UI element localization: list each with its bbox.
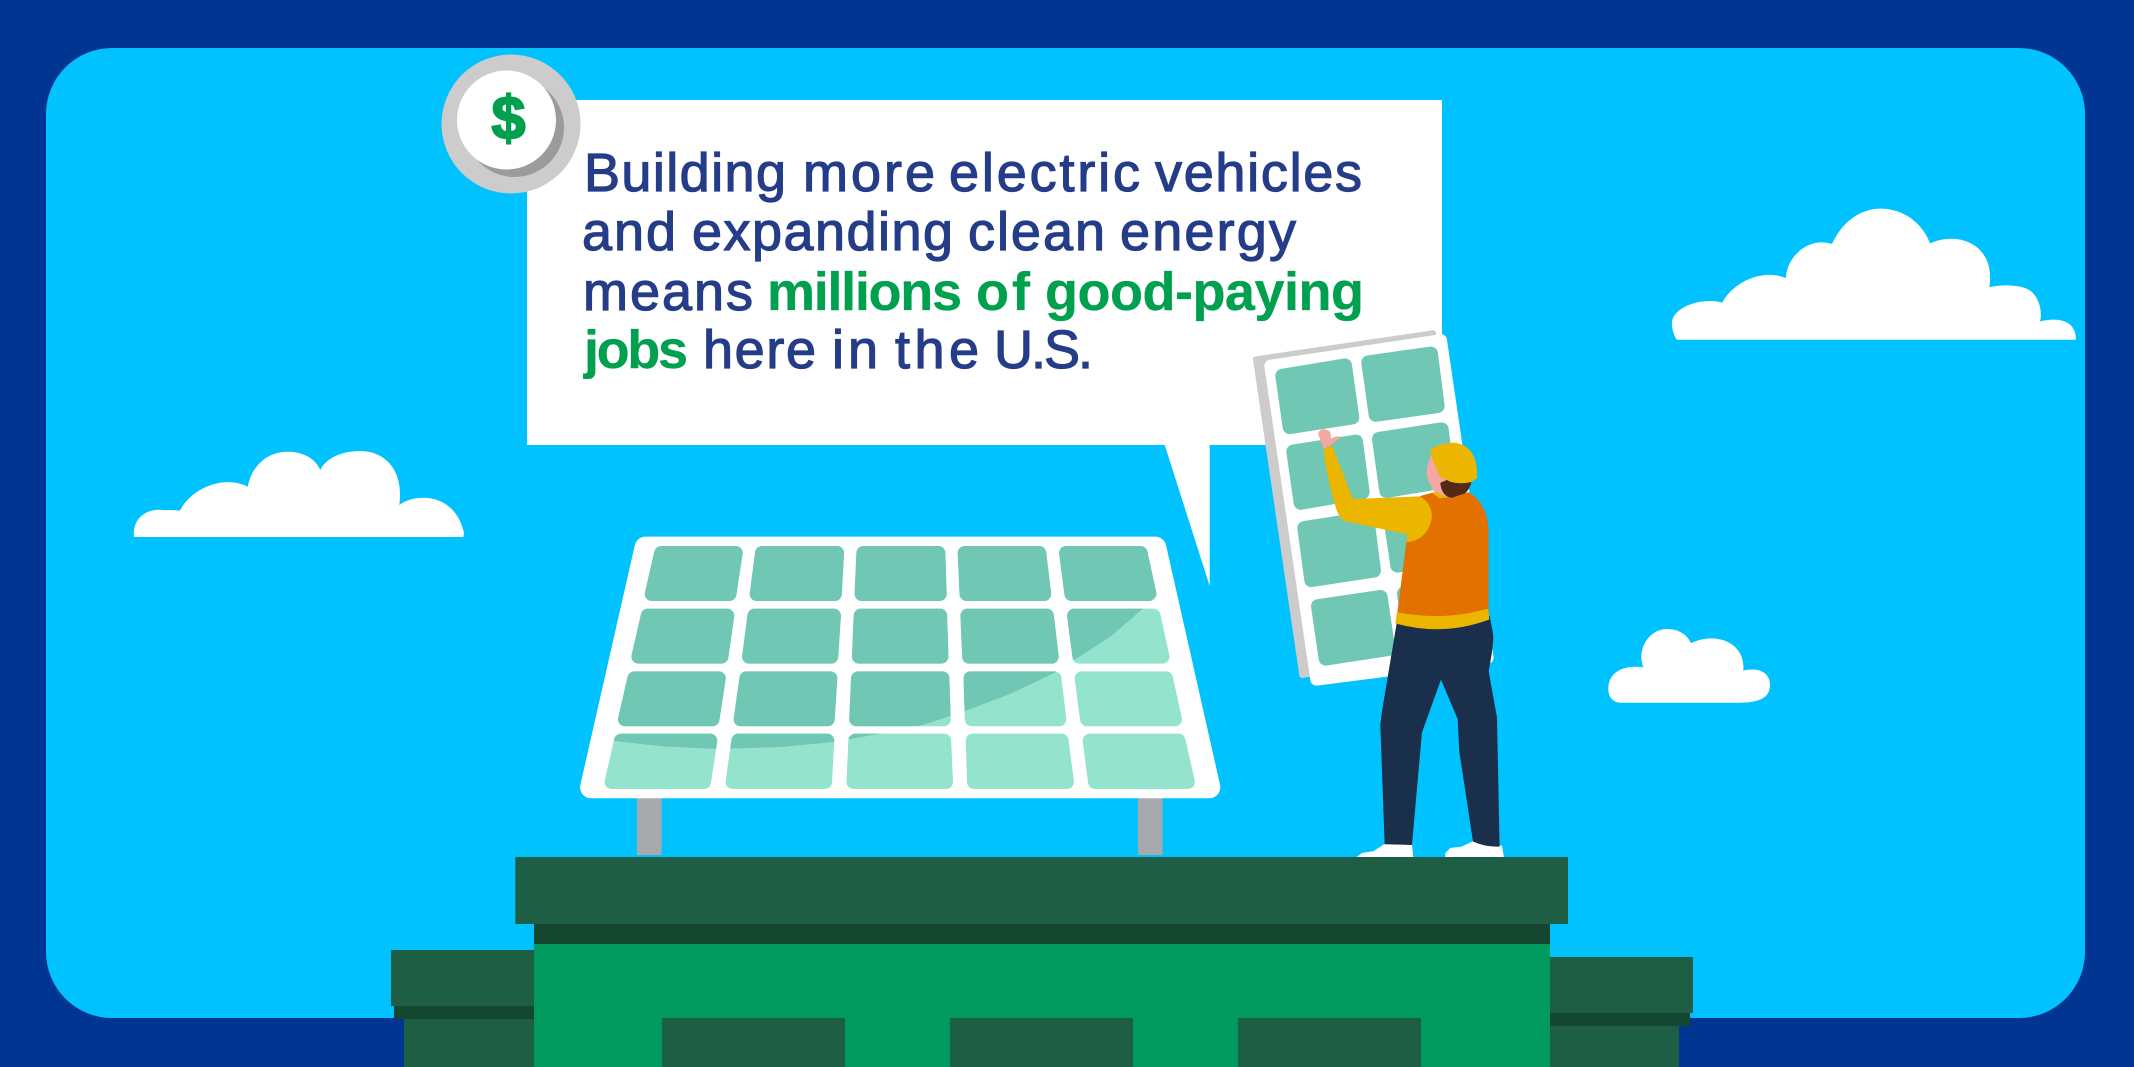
worker figure	[1318, 429, 1504, 857]
windows	[662, 1018, 1421, 1067]
raised arm	[1324, 445, 1432, 542]
panel posts	[637, 795, 1162, 855]
shoes	[1356, 841, 1504, 857]
trousers	[1380, 616, 1500, 847]
text line 2: expanding	[692, 202, 953, 262]
text line 3: good-paying	[1045, 262, 1364, 322]
text line 4: jobs	[583, 320, 688, 380]
cloud: lower right	[1608, 629, 1770, 703]
text line 1: vehicles	[1155, 143, 1362, 203]
text line 1: more	[803, 143, 935, 203]
main building wall	[534, 944, 1550, 1067]
solar panel on roof	[591, 548, 1209, 855]
text line 4: in	[832, 320, 878, 380]
roof	[515, 857, 1568, 924]
text line 4: here	[703, 320, 816, 380]
text line 4: U.S.	[994, 320, 1093, 380]
left side wing	[391, 950, 534, 1067]
cloud: upper right	[1672, 209, 2076, 340]
panel cells: sunlit	[612, 553, 1188, 782]
roof underside	[534, 924, 1550, 944]
text line 1: Building	[584, 143, 786, 203]
text line 2: and	[582, 202, 676, 262]
cloud: left	[134, 451, 464, 537]
icon: dollar coin	[442, 54, 580, 194]
hair	[1440, 480, 1472, 498]
hand	[1318, 429, 1340, 449]
text line 3: means	[583, 262, 753, 322]
collar	[1432, 492, 1449, 498]
waist band	[1395, 608, 1489, 629]
text line 4: the	[895, 320, 979, 380]
panel frame	[591, 548, 1209, 787]
neck and face	[1427, 451, 1454, 499]
panel cells: shaded	[614, 546, 1156, 749]
text line 2: clean	[968, 202, 1105, 262]
right side wing	[1550, 957, 1693, 1067]
text line 3: millions	[767, 262, 962, 322]
hard hat	[1430, 443, 1478, 483]
speech bubble	[527, 100, 1442, 586]
icon: dollar coin: $	[492, 84, 526, 152]
speech bubble text	[582, 143, 1364, 380]
solar panel held upright	[1256, 333, 1488, 680]
text line 1: electric	[949, 143, 1140, 203]
building	[391, 857, 1693, 1067]
vest	[1397, 492, 1489, 623]
text line 2: energy	[1120, 202, 1296, 262]
text line 3: of	[976, 262, 1031, 322]
